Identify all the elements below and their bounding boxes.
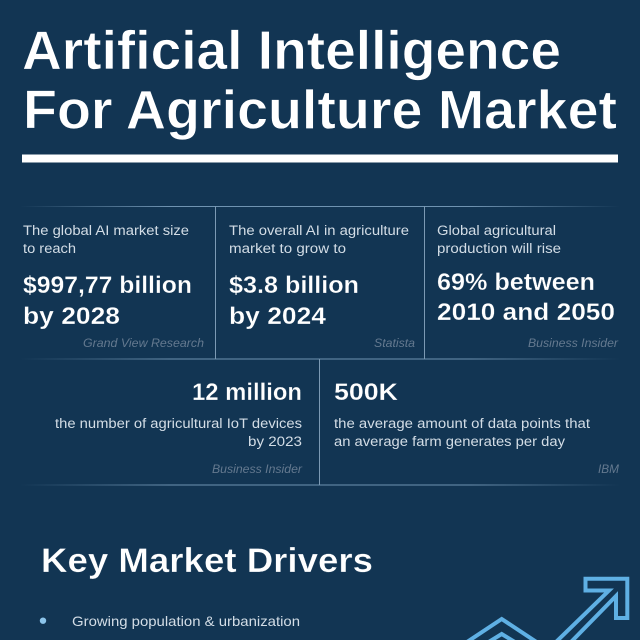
stat: farm data points: an average farm generates per day bbox=[334, 434, 565, 449]
title underline bar bbox=[22, 154, 618, 162]
stat: global agricultural production: Global agricultural bbox=[437, 223, 556, 238]
stat: farm data points bbox=[334, 379, 619, 476]
stat: global AI market: Grand View Research bbox=[83, 336, 204, 350]
icon: growth arrow with chevrons bbox=[467, 579, 627, 640]
stat: agricultural IoT devices bbox=[55, 379, 303, 476]
stat: farm data points: 500K bbox=[334, 379, 399, 406]
title: For Agriculture Market bbox=[23, 78, 617, 140]
stat: agricultural IoT devices: by 2023 bbox=[248, 434, 302, 449]
heading: key market drivers: Key Market Drivers bbox=[41, 542, 373, 580]
stat: global AI market: by 2028 bbox=[23, 303, 120, 330]
stat: AI in agriculture market: Statista bbox=[374, 336, 415, 350]
bullet item: Growing population & urbanization bbox=[72, 613, 300, 629]
stat: farm data points: IBM bbox=[598, 462, 619, 476]
stat: AI in agriculture market: The overall AI in agriculture bbox=[229, 223, 409, 238]
stat: global AI market: to reach bbox=[23, 241, 76, 256]
stat: AI in agriculture market: market to grow to bbox=[229, 241, 346, 256]
stat: global AI market: $997,77 billion bbox=[23, 272, 192, 299]
stat: global agricultural production: 69% between bbox=[437, 269, 595, 296]
stat: agricultural IoT devices: the number of agricultural IoT devices bbox=[55, 416, 302, 431]
stat: agricultural IoT devices: 12 million bbox=[192, 379, 302, 406]
stat: global agricultural production: production will rise bbox=[437, 241, 561, 256]
stat: AI in agriculture market bbox=[229, 223, 415, 350]
stat: global AI market: The global AI market size bbox=[23, 223, 189, 238]
stat: global agricultural production bbox=[437, 223, 619, 350]
stat: global AI market bbox=[23, 223, 204, 350]
title: Artificial Intelligence bbox=[22, 19, 561, 81]
stat: agricultural IoT devices: Business Insider bbox=[212, 462, 303, 476]
stat: global agricultural production: 2010 and 2050 bbox=[437, 299, 615, 326]
stat: AI in agriculture market: by 2024 bbox=[229, 303, 327, 330]
stat: farm data points: the average amount of data points that bbox=[334, 416, 590, 431]
stat: AI in agriculture market: $3.8 billion bbox=[229, 272, 359, 299]
title bbox=[22, 19, 617, 140]
stat: global agricultural production: Business Insider bbox=[528, 336, 619, 350]
